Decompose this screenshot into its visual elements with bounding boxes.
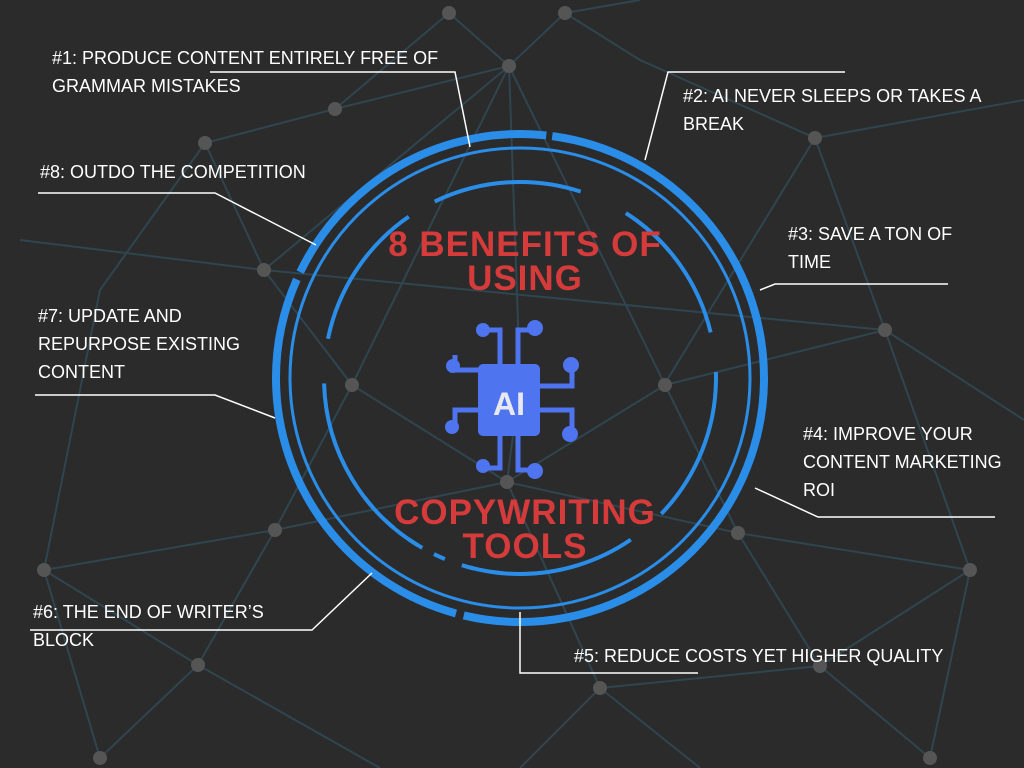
label 7: CONTENT	[38, 362, 125, 382]
leader lines	[30, 72, 995, 673]
title: USING	[467, 259, 583, 298]
label 3: TIME	[788, 252, 831, 272]
label 1: GRAMMAR MISTAKES	[52, 76, 241, 96]
icon: AI chip: AI	[493, 386, 525, 422]
label 3: #3: SAVE A TON OF	[788, 224, 952, 244]
label 7: #7: UPDATE AND	[38, 306, 182, 326]
label 6: #6: THE END OF WRITER’S	[33, 602, 264, 622]
title	[388, 225, 662, 566]
label 4: #4: IMPROVE YOUR	[803, 424, 973, 444]
label 7: REPURPOSE EXISTING	[38, 334, 240, 354]
label 1	[52, 48, 438, 96]
label 2: BREAK	[683, 114, 744, 134]
label 7	[38, 306, 240, 382]
title: 8 BENEFITS OF	[388, 225, 662, 264]
label 6: BLOCK	[33, 630, 94, 650]
label 2: #2: AI NEVER SLEEPS OR TAKES A	[683, 86, 981, 106]
label 8: #8: OUTDO THE COMPETITION	[40, 162, 306, 182]
label 4	[803, 424, 1002, 500]
label 2	[683, 86, 982, 134]
label 4: ROI	[803, 480, 835, 500]
title: COPYWRITING	[394, 493, 656, 532]
label 4: CONTENT MARKETING	[803, 452, 1002, 472]
label 1: #1: PRODUCE CONTENT ENTIRELY FREE OF	[52, 48, 438, 68]
ring: outer	[276, 134, 764, 622]
label 3	[788, 224, 952, 272]
icon: AI chip	[445, 320, 579, 479]
label 5: #5: REDUCE COSTS YET HIGHER QUALITY	[574, 646, 943, 666]
title: TOOLS	[463, 527, 587, 566]
label 6	[33, 602, 264, 650]
